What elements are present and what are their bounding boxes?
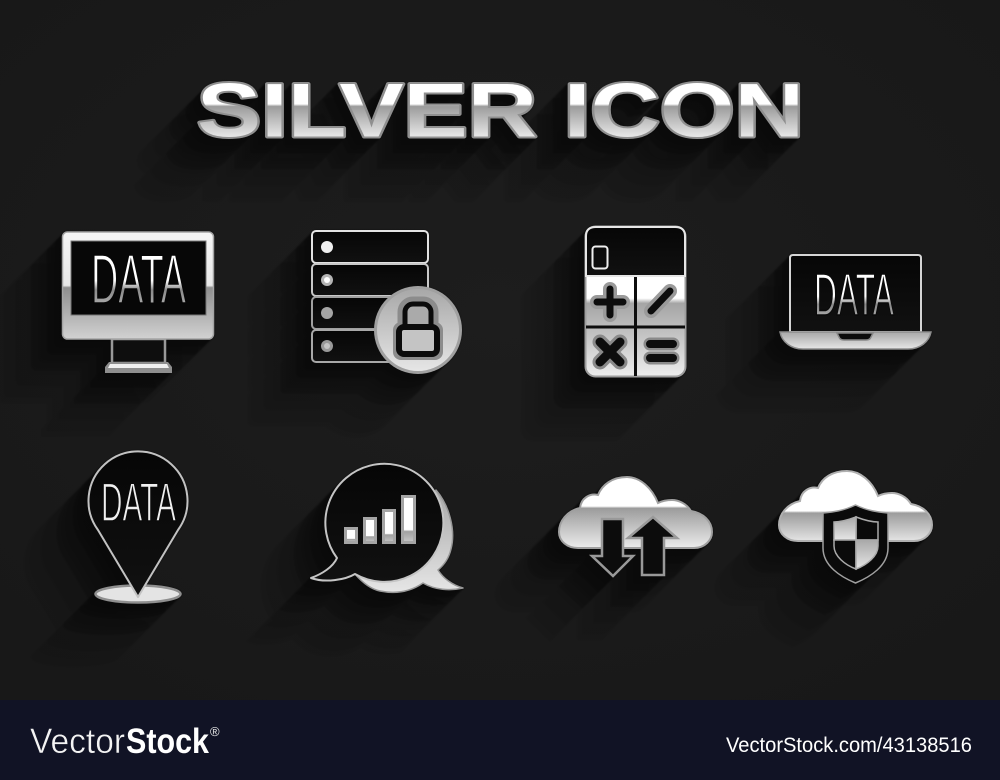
arrow: download [592, 519, 633, 576]
icon: speech bubbles with signal bars [311, 464, 463, 592]
button: equals [650, 344, 673, 358]
button: divide [651, 291, 670, 311]
icon: shield [823, 505, 888, 583]
logo: VectorStock: ® [210, 724, 220, 739]
logo: VectorStock: Vector [30, 722, 125, 761]
chart: signal bars [346, 496, 414, 542]
icon: laptop with DATA [780, 255, 931, 349]
logo: VectorStock: Stock [126, 722, 209, 761]
footer bar [0, 700, 1000, 780]
icon: laptop with DATA: DATA [814, 262, 894, 328]
title: SILVER ICON [197, 68, 804, 154]
icon: cloud with upload and download arrows [559, 477, 712, 576]
icon: cloud with security shield [779, 471, 932, 583]
arrow: upload [628, 517, 677, 575]
icon: server rack with padlock [312, 231, 462, 374]
icon: map pin with DATA: DATA [101, 471, 176, 533]
button: multiply [600, 342, 620, 362]
icon: calculator [586, 226, 686, 376]
icon: desktop monitor with DATA [62, 232, 214, 373]
icon: padlock [393, 301, 443, 360]
logo: VectorStock [30, 722, 220, 761]
icon: map pin with DATA [88, 451, 188, 602]
image id text: VectorStock.com/43138516 [726, 734, 972, 757]
button: plus [597, 289, 623, 315]
icon: desktop monitor with DATA: DATA [91, 240, 186, 318]
